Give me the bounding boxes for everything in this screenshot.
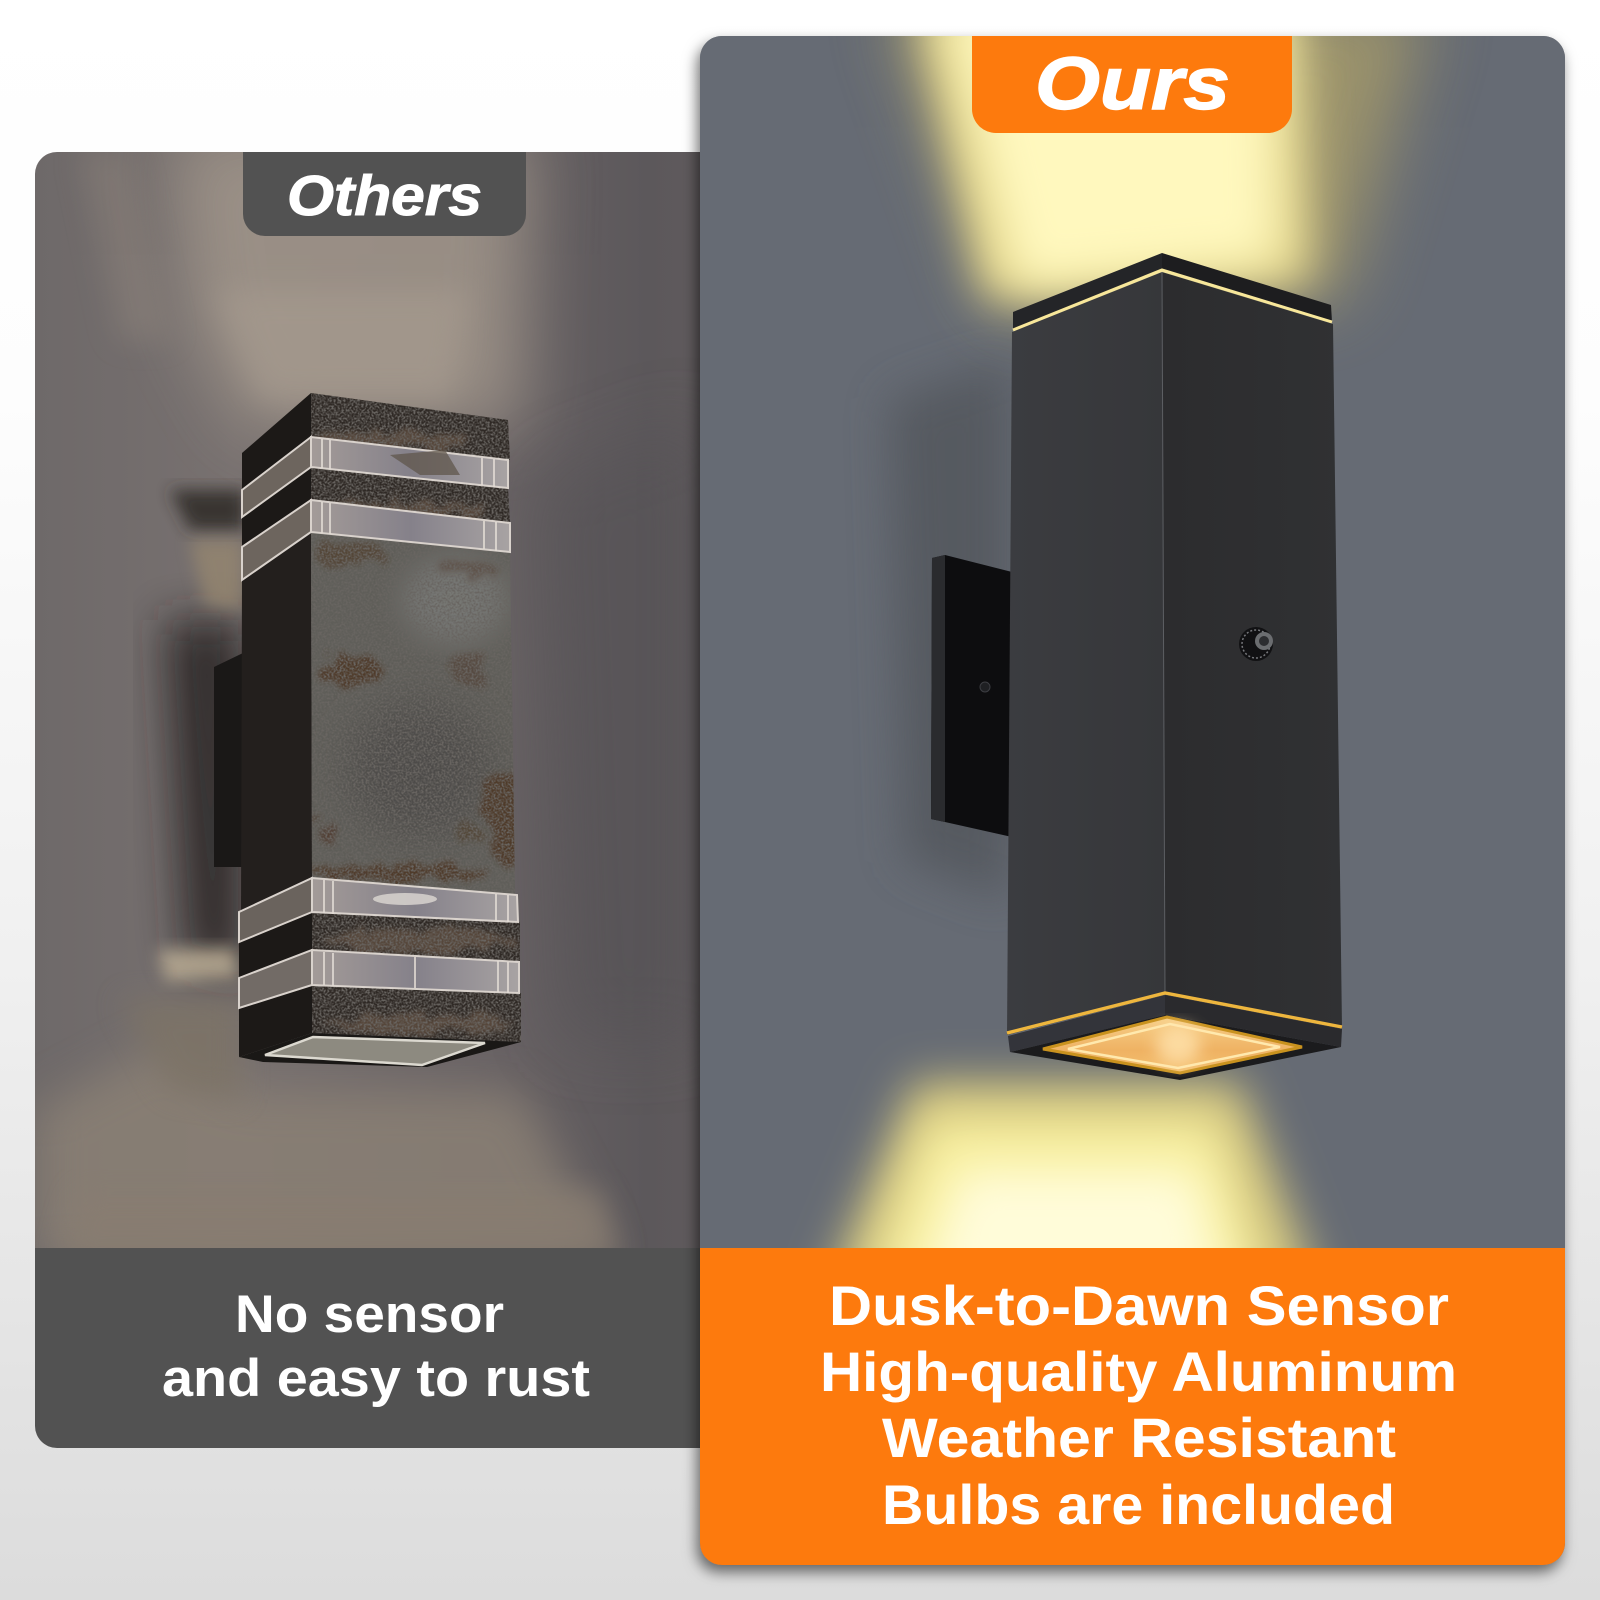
panel: ours <box>700 0 1565 1565</box>
tab: ours: Ours <box>1035 42 1230 125</box>
lamp: rusty sconce <box>214 390 532 1067</box>
lamp body, dark side <box>241 532 312 912</box>
glass ribs and bulb reflections <box>322 439 508 993</box>
caption: others <box>35 1248 700 1448</box>
lamp body right face <box>1162 272 1342 1029</box>
caption: ours: High-quality Aluminum <box>820 1340 1457 1403</box>
lamp body, rusted front <box>311 533 515 894</box>
wall shadow <box>890 360 1010 900</box>
top cap <box>1013 253 1162 330</box>
glass bands <box>239 437 519 1008</box>
banded sections, rusted front <box>305 390 525 1050</box>
photocell sensor <box>1239 627 1273 661</box>
tab: others <box>243 152 526 236</box>
bottom face <box>1010 1015 1341 1080</box>
glow: lower beam <box>825 1080 1320 1290</box>
plate screw <box>980 682 990 692</box>
mounting plate <box>214 653 243 867</box>
caption: ours: Bulbs are included <box>882 1473 1395 1536</box>
caption: others: No sensor <box>235 1285 504 1344</box>
panel: others <box>35 130 700 1448</box>
caption: ours: Dusk-to-Dawn Sensor <box>829 1274 1449 1337</box>
glow: upper beam <box>890 0 1430 310</box>
caption: ours <box>700 1248 1565 1565</box>
tab: ours <box>972 36 1292 133</box>
photo: sleek black wall lamp with warm light <box>700 0 1565 1290</box>
caption: ours: Weather Resistant <box>882 1406 1396 1469</box>
lamp body left face <box>1007 272 1165 1035</box>
photo: rusty wall lamp on a wall <box>35 130 700 1260</box>
lamp underside and lens <box>239 1033 521 1067</box>
bottom band <box>1008 995 1165 1052</box>
gold bottom line <box>1007 993 1342 1033</box>
caption: others: and easy to rust <box>162 1349 590 1408</box>
lamp: black sconce <box>931 253 1342 1080</box>
mounting plate <box>931 555 1012 837</box>
top cap and banded sections, dark side <box>239 393 312 1057</box>
tab: others: Others <box>287 164 482 228</box>
lens <box>1043 1017 1302 1073</box>
gold top line <box>1013 270 1332 330</box>
